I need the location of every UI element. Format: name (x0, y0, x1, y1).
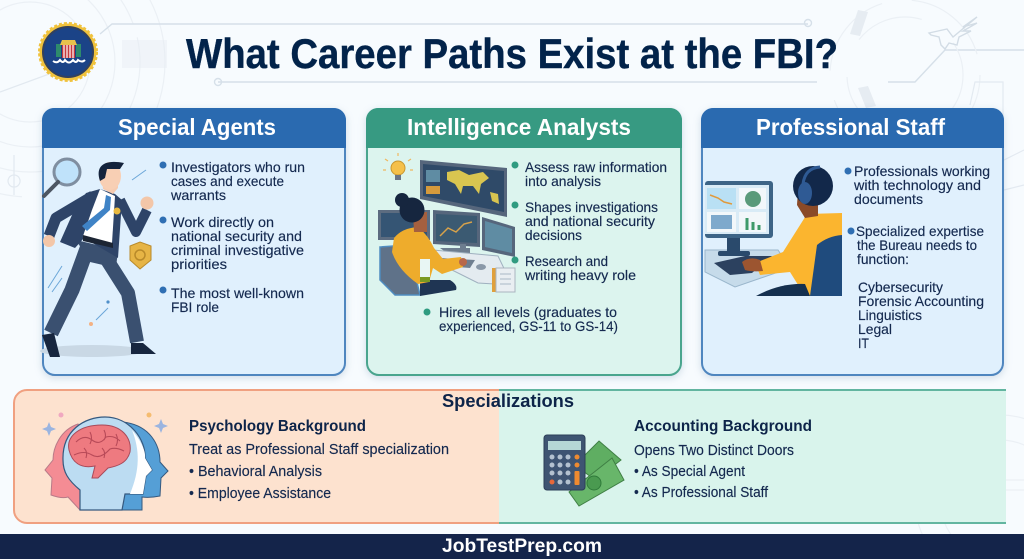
bullets: Special Agents: Work directly on (171, 214, 274, 230)
text: accounting background: Accounting Background (634, 418, 812, 435)
bullets: Professional Staff: Legal (858, 321, 892, 337)
bullets: Professional Staff: documents (854, 191, 923, 207)
bullets: Intelligence Analysts: and national security (525, 213, 655, 229)
text: psychology background: Treat as Professional Staff specialization (189, 442, 449, 458)
text: psychology background (189, 418, 449, 502)
bullets: Intelligence Analysts (424, 159, 667, 334)
bullets: Special Agents: cases and execute (171, 173, 284, 189)
text: accounting background (634, 418, 812, 501)
panel: accounting background (499, 390, 1006, 523)
bullets: Intelligence Analysts: Research and (525, 253, 608, 269)
heading: Intelligence Analysts: Intelligence Analysts (407, 114, 631, 140)
bullets: Professional Staff: with technology and (853, 177, 981, 193)
bullets: Intelligence Analysts: into analysis (525, 173, 601, 189)
icon: running special agent (40, 159, 156, 357)
bullets: Professional Staff: the Bureau needs to (857, 237, 977, 253)
title: What Career Paths Exist at the FBI? (186, 30, 838, 77)
text: psychology background: Psychology Background (189, 418, 366, 435)
bullets: Special Agents: The most well-known (171, 285, 304, 301)
bullets: Professional Staff: Cybersecurity (858, 279, 943, 295)
panel: Professional Staff (701, 108, 1004, 375)
bullets: Intelligence Analysts: Assess raw information (525, 159, 667, 175)
icon: analyst at monitors (378, 153, 515, 296)
bullets: Special Agents: criminal investigative (171, 242, 304, 258)
bullets: Special Agents (160, 159, 305, 315)
icon: calculator and cash (544, 435, 624, 506)
heading: Professional Staff: Professional Staff (756, 114, 945, 140)
bullets: Professional Staff: Specialized expertise (856, 223, 984, 239)
text: accounting background: • As Professional Staff (634, 485, 769, 501)
panel: Intelligence Analysts (366, 108, 682, 375)
heading: Specializations: Specializations (442, 391, 574, 411)
bullets: Professional Staff: Linguistics (858, 307, 922, 323)
panel: Special Agents (40, 108, 346, 375)
bullets: Special Agents: national security and (171, 228, 302, 244)
icon: FBI seal (40, 24, 96, 80)
bullets: Intelligence Analysts: Shapes investigations (525, 199, 658, 215)
text: accounting background: • As Special Agent (634, 464, 745, 480)
bullets: Special Agents: Investigators who run (171, 159, 305, 175)
footer (0, 534, 1024, 559)
bullets: Intelligence Analysts: writing heavy role (524, 267, 636, 283)
icon: heads and brain (42, 412, 168, 510)
text: accounting background: Opens Two Distinct Doors (634, 443, 794, 459)
text: psychology background: • Employee Assistance (189, 486, 331, 502)
bullets: Intelligence Analysts: decisions (525, 227, 582, 243)
bullets: Special Agents: FBI role (171, 299, 219, 315)
bullets: Professional Staff: IT (858, 335, 869, 351)
footer: JobTestPrep.com (442, 536, 602, 557)
bullets: Special Agents: warrants (170, 187, 226, 203)
bullets: Professional Staff: function: (857, 251, 909, 267)
text: psychology background: • Behavioral Analysis (189, 464, 322, 480)
bullets: Special Agents: priorities (171, 256, 227, 272)
bullets: Professional Staff (844, 163, 990, 351)
bullets: Professional Staff: Forensic Accounting (858, 293, 984, 309)
panel: psychology background (14, 390, 499, 523)
panel: Specializations (14, 390, 1006, 523)
icon: eagle watermark (929, 17, 977, 49)
bullets: Intelligence Analysts: experienced, GS-11 to GS-14) (439, 318, 618, 334)
bullets: Intelligence Analysts: Hires all levels (graduates to (439, 304, 617, 320)
bullets: Professional Staff: Professionals working (854, 163, 990, 179)
heading: Special Agents: Special Agents (118, 114, 276, 140)
icon: staff member at computer (705, 166, 842, 296)
